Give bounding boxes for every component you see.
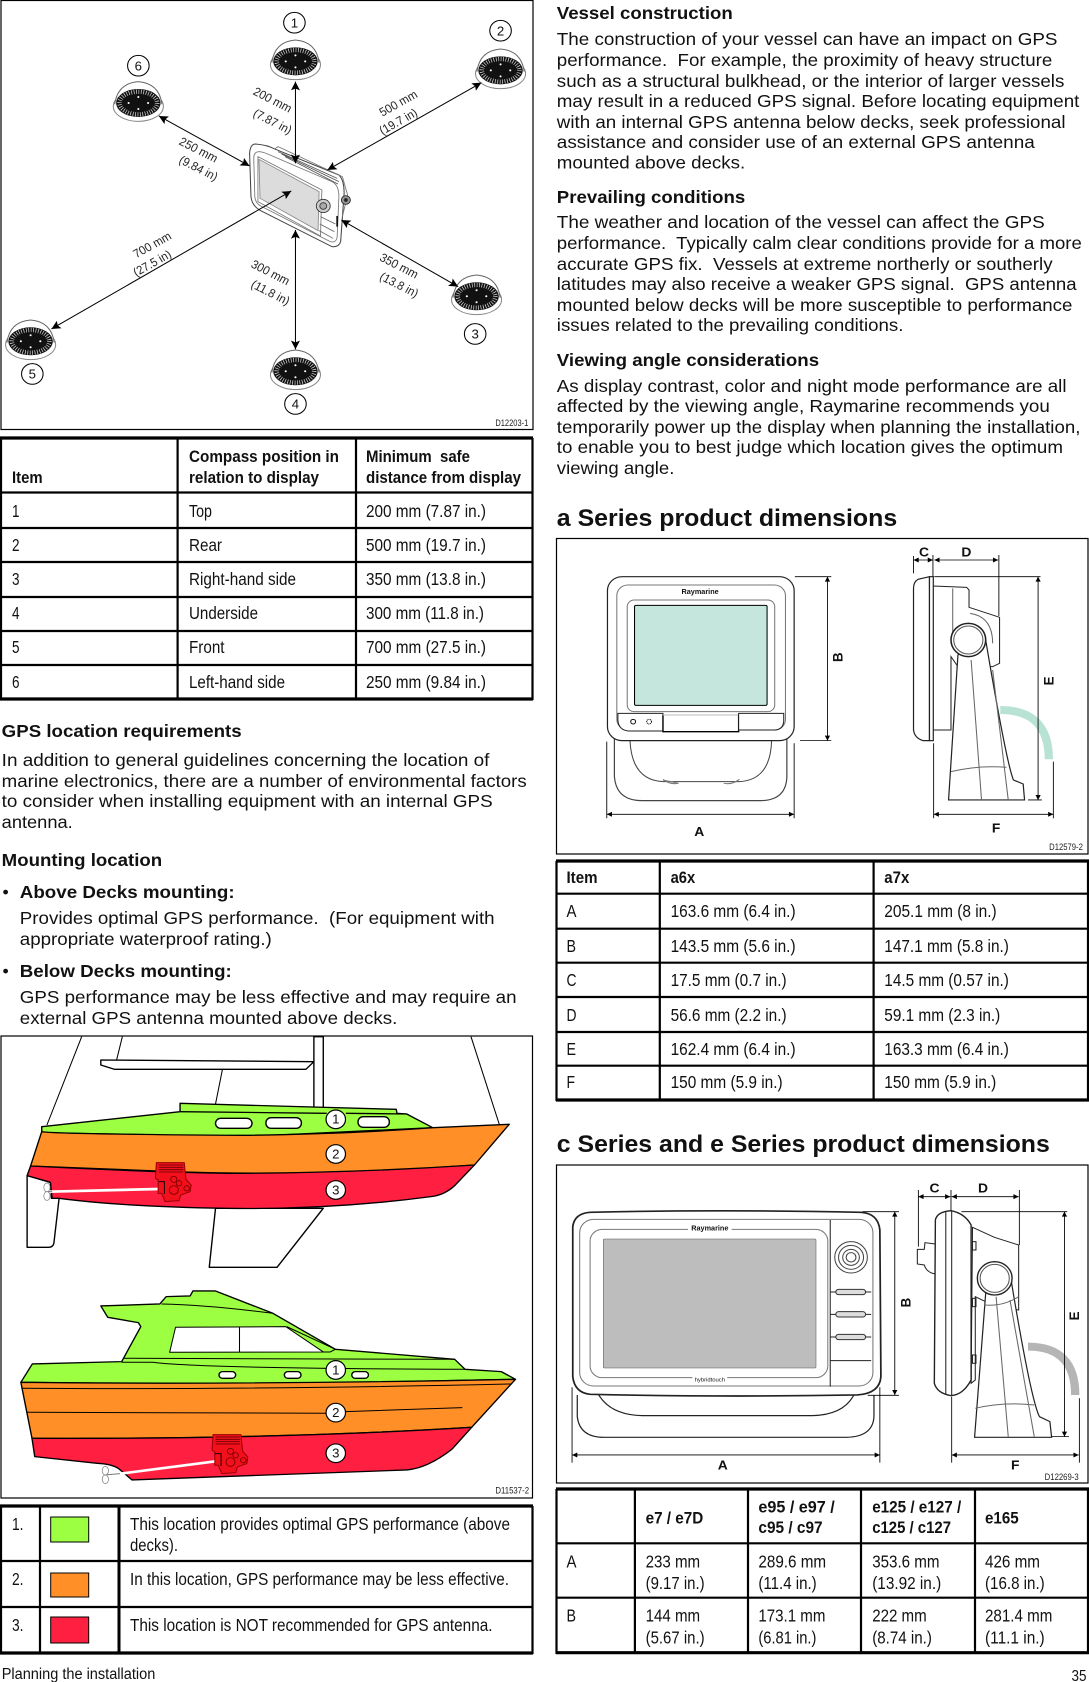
- table rows: 700 mm (27.5 in.): [366, 637, 486, 657]
- a Series dimension letters: F: [992, 821, 1000, 836]
- panel: c and e Series dimension drawing: [556, 1165, 1088, 1483]
- table row A: (13.92 in.): [872, 1573, 941, 1593]
- table rows: 5: [12, 637, 20, 657]
- legend row 3: This location is NOT recommended for GPS antenna.: [130, 1615, 492, 1635]
- c Series brand name: Raymarine: [691, 1225, 728, 1233]
- table rows: 4: [12, 603, 20, 623]
- heading: Vessel construction: Vessel construction: [557, 3, 733, 23]
- callout numbers: 1: [291, 16, 298, 30]
- a Series dimension letters: C: [919, 545, 929, 560]
- table header: e125 / e127 /: [872, 1498, 961, 1517]
- heading: Viewing angle considerations: Viewing angle considerations: [557, 350, 819, 370]
- table row B: (6.81 in.): [758, 1627, 816, 1647]
- table rows: 147.1 mm (5.8 in.): [884, 936, 1009, 956]
- callout numbers: 5: [29, 367, 36, 382]
- table: location legend: [0, 1506, 533, 1654]
- heading: Mounting location: Mounting location: [2, 850, 162, 870]
- legend row 1: decks).: [130, 1535, 178, 1555]
- a Series dimension letters: A: [694, 824, 704, 839]
- arrow: to compass 2: [327, 83, 481, 170]
- table header: a7x: [884, 868, 910, 887]
- table row A: 289.6 mm: [758, 1551, 826, 1571]
- table row A: 353.6 mm: [872, 1551, 940, 1571]
- table header: Minimum safe: [366, 447, 470, 466]
- icon: compass 2: [476, 49, 526, 89]
- text block: vessel construction: with an internal GPS antenna below decks, seek professional: [556, 112, 1066, 132]
- table rows: 3: [12, 569, 20, 589]
- table rows: 59.1 mm (2.3 in.): [884, 1005, 1000, 1025]
- table rows: 162.4 mm (6.4 in.): [671, 1039, 796, 1059]
- text block: viewing angle: As display contrast, color and night mode performance are all: [557, 376, 1066, 396]
- a Series dimension letters: D: [961, 545, 972, 560]
- table header: [646, 1498, 1019, 1537]
- text block: GPS location intro: marine electronics, there are a number of environmental factors: [2, 771, 527, 791]
- table header: c95 / c97: [758, 1518, 823, 1537]
- icon: compass 1: [270, 40, 320, 80]
- text block: GPS location intro: In addition to general guidelines concerning the location of: [2, 750, 489, 770]
- a Series dimension letters: B: [830, 652, 846, 662]
- table row B: (8.74 in.): [872, 1627, 932, 1647]
- table rows: Underside: [189, 603, 258, 623]
- a Series dimension lines: [607, 555, 1053, 818]
- table rows: Rear: [189, 535, 222, 555]
- c Series dimension lines: [572, 1190, 1079, 1463]
- distance labels: 200 mm: [251, 85, 294, 115]
- table rows: F: [566, 1072, 575, 1092]
- text block: viewing angle: [557, 376, 1080, 478]
- text block: below decks mounting: [2, 961, 516, 1028]
- table rows: 56.6 mm (2.2 in.): [671, 1005, 787, 1025]
- table row B: 173.1 mm: [758, 1606, 825, 1626]
- text block: GPS location intro: antenna.: [2, 812, 73, 832]
- legend row 1: This location provides optimal GPS performance (above: [130, 1514, 510, 1534]
- distance labels: [131, 85, 421, 308]
- text block: above decks mounting: Provides optimal GPS performance. (For equipment with: [20, 908, 495, 928]
- panel: compass safe distance diagram: [1, 0, 533, 430]
- table rows: Front: [189, 637, 225, 657]
- a Series dimension letters: E: [1041, 676, 1057, 685]
- icon: compass 4: [270, 350, 320, 390]
- c Series dimension letters: D: [978, 1181, 988, 1196]
- table row A: (11.4 in.): [758, 1573, 817, 1593]
- table header: c125 / c127: [872, 1518, 951, 1537]
- a Series front view: [607, 577, 794, 801]
- arrow: to compass 1: [294, 82, 297, 163]
- table header: distance from display: [366, 468, 521, 487]
- table rows: 150 mm (5.9 in.): [884, 1072, 996, 1092]
- text block: prevailing conditions: The weather and location of the vessel can affect the GPS: [557, 212, 1045, 232]
- sailboat: [27, 1037, 509, 1267]
- distance labels: (7.87 in): [251, 106, 294, 137]
- table rows: 300 mm (11.8 in.): [366, 603, 484, 623]
- table row B: 281.4 mm: [985, 1606, 1052, 1626]
- table rows: 17.5 mm (0.7 in.): [671, 970, 787, 990]
- table header: relation to display: [189, 468, 319, 487]
- text block: viewing angle: affected by the viewing angle, Raymarine recommends you: [557, 396, 1050, 416]
- legend row 3: 3.: [12, 1615, 24, 1635]
- figure code: D12203-1: [495, 418, 528, 428]
- c Series brand name: hybridtouch: [695, 1378, 725, 1384]
- sailboat shaft and propeller: [44, 1183, 159, 1200]
- table row B: B: [566, 1606, 576, 1626]
- table rows: C: [566, 970, 576, 990]
- text block: prevailing conditions: mounted below decks will be more susceptible to performance: [557, 295, 1073, 315]
- distance labels: (9.84 in): [177, 153, 220, 184]
- table header: Item: [12, 468, 43, 487]
- table header: Item: [566, 868, 598, 887]
- table row A: (16.8 in.): [985, 1573, 1045, 1593]
- legend row 1: [12, 1514, 510, 1555]
- table rows: Top: [189, 501, 212, 521]
- heading: GPS location requirements: GPS location requirements: [2, 721, 242, 741]
- table header: e95 / e97 /: [758, 1498, 835, 1517]
- callout numbers: 2: [497, 24, 504, 38]
- table rows: 163.6 mm (6.4 in.): [671, 901, 796, 921]
- text block: vessel construction: assistance and consider use of an external GPS antenna: [557, 132, 1035, 152]
- table rows: 2: [12, 535, 20, 555]
- zone callout numbers: 3: [332, 1183, 339, 1197]
- zone callout numbers: 2: [332, 1405, 339, 1420]
- table rows: 163.3 mm (6.4 in.): [884, 1039, 1009, 1059]
- table rows: [566, 901, 1009, 1092]
- table rows: 6: [12, 672, 20, 692]
- table rows: 150 mm (5.9 in.): [671, 1072, 783, 1092]
- table row B: (11.1 in.): [985, 1627, 1045, 1647]
- motorboat shaft and propeller: [102, 1461, 216, 1484]
- zone callout numbers: 1: [332, 1363, 339, 1377]
- table rows: Right-hand side: [189, 569, 296, 589]
- text block: below decks mounting: GPS performance may be less effective and may require an: [20, 987, 517, 1007]
- c Series side view: [917, 1211, 1075, 1437]
- table rows: 14.5 mm (0.57 in.): [884, 970, 1009, 990]
- icon: compass 5: [6, 320, 56, 360]
- text block: above decks mounting: •: [2, 882, 9, 902]
- callout numbers: [29, 16, 504, 412]
- table rows: 350 mm (13.8 in.): [366, 569, 486, 589]
- table header: [12, 447, 521, 487]
- text block: below decks mounting: external GPS antenna mounted above decks.: [20, 1008, 397, 1028]
- table rows: 250 mm (9.84 in.): [366, 672, 486, 692]
- heading: c Series and e Series product dimensions: c Series and e Series product dimensions: [557, 1131, 1050, 1158]
- sailboat engine: [155, 1163, 191, 1202]
- c Series dimension letters: F: [1011, 1458, 1019, 1472]
- c Series dimension letters: A: [718, 1458, 728, 1472]
- table rows: 143.5 mm (5.6 in.): [671, 936, 796, 956]
- c Series brand name: [688, 1225, 732, 1384]
- table row A: A: [566, 1551, 577, 1571]
- table row B: [566, 1606, 1052, 1647]
- heading: a Series product dimensions: a Series product dimensions: [557, 505, 897, 532]
- table rows: 1: [12, 501, 20, 521]
- table row A: [566, 1551, 1045, 1593]
- legend row 1: 1.: [12, 1514, 24, 1534]
- figure code: D12269-3: [1045, 1472, 1079, 1482]
- distance labels: 350 mm: [377, 251, 421, 281]
- table row A: 233 mm: [646, 1551, 700, 1571]
- text block: above decks mounting: appropriate waterproof rating.): [20, 929, 272, 949]
- legend row 2: In this location, GPS performance may be less effective.: [130, 1569, 509, 1589]
- text block: GPS location intro: to consider when installing equipment with an internal GPS: [2, 791, 493, 811]
- table row A: 426 mm: [985, 1551, 1040, 1571]
- c Series dimension letters: C: [929, 1181, 940, 1196]
- text block: viewing angle: to enable you to best judge which location gives the optimum: [557, 437, 1063, 457]
- text block: viewing angle: viewing angle.: [557, 458, 674, 478]
- distance labels: (13.8 in): [377, 270, 421, 300]
- legend row 2: [12, 1569, 509, 1597]
- text block: below decks mounting: Below Decks mounting:: [20, 961, 232, 981]
- text block: vessel construction: mounted above decks.: [557, 152, 745, 172]
- table row A: (9.17 in.): [646, 1573, 705, 1593]
- table rows: E: [566, 1039, 576, 1059]
- table rows: Left-hand side: [189, 672, 285, 692]
- text block: vessel construction: performance. For example, the proximity of heavy structure: [557, 50, 1052, 70]
- distance labels: 700 mm: [131, 229, 174, 261]
- table header: e7 / e7D: [646, 1508, 703, 1527]
- table rows: 500 mm (19.7 in.): [366, 535, 486, 555]
- panel: boat GPS location zones: [1, 1036, 532, 1498]
- zone callout numbers: 1: [332, 1112, 339, 1127]
- motorboat: [21, 1291, 515, 1480]
- table rows: D: [566, 1005, 576, 1025]
- distance labels: (11.8 in): [249, 277, 292, 308]
- text block: below decks mounting: •: [2, 961, 9, 981]
- callout numbers: 6: [135, 59, 142, 73]
- c Series dimension letters: E: [1067, 1311, 1082, 1320]
- table header: [566, 868, 910, 887]
- table: compass positions: [0, 438, 533, 700]
- text block: prevailing conditions: latitudes may also receive a weaker GPS signal. GPS antenna: [557, 274, 1077, 294]
- c Series dimension letters: B: [898, 1298, 914, 1307]
- text block: viewing angle: temporarily power up the display when planning the installation,: [557, 417, 1080, 437]
- heading: Prevailing conditions: Prevailing conditions: [557, 187, 745, 207]
- zone callout numbers: 2: [332, 1147, 339, 1161]
- text block: vessel construction: such as a structural bulkhead, or the interior of larger vessels: [557, 71, 1064, 91]
- legend row 2: 2.: [12, 1569, 24, 1589]
- icon: compass 3: [452, 275, 502, 315]
- motorboat engine: [212, 1435, 248, 1474]
- table rows: 200 mm (7.87 in.): [366, 501, 486, 521]
- text block: above decks mounting: Above Decks mounting:: [20, 882, 235, 902]
- legend row 3: [12, 1615, 492, 1643]
- table header: Compass position in: [189, 447, 339, 466]
- arrow: to compass 3: [341, 220, 458, 287]
- table rows: [12, 501, 486, 692]
- callout numbers: 3: [472, 327, 479, 342]
- table header: a6x: [671, 868, 696, 887]
- text block: prevailing conditions: accurate GPS fix. Vessels at extreme northerly or southerly: [557, 254, 1053, 274]
- table: a Series dimensions: [556, 861, 1089, 1101]
- text block: above decks mounting: [2, 882, 495, 949]
- text block: prevailing conditions: performance. Typically calm clear conditions provide for a more: [557, 233, 1082, 253]
- numbered callouts: [22, 12, 511, 414]
- table: c and e Series dimensions: [556, 1489, 1089, 1654]
- zone callout numbers: [332, 1112, 339, 1461]
- table rows: A: [566, 901, 577, 921]
- callout numbers: 4: [292, 397, 299, 412]
- table rows: B: [566, 936, 576, 956]
- zone callouts: [326, 1110, 346, 1463]
- a Series dimension letters: [694, 545, 1057, 839]
- table row B: 144 mm: [646, 1606, 700, 1626]
- arrow: to compass 4: [294, 230, 297, 349]
- text block: vessel construction: may result in a reduced GPS signal. Before locating equipment: [557, 91, 1079, 111]
- figure code: D11537-2: [495, 1486, 529, 1496]
- a Series side view: [914, 577, 1049, 800]
- table header: e165: [985, 1508, 1019, 1527]
- distance labels: 250 mm: [177, 135, 220, 165]
- arrow: to compass 5: [51, 191, 291, 329]
- c Series front view: [573, 1211, 881, 1437]
- table rows: 205.1 mm (8 in.): [884, 901, 997, 921]
- distance labels: (19.7 in): [377, 106, 420, 138]
- table row B: (5.67 in.): [646, 1627, 705, 1647]
- text block: prevailing conditions: [557, 212, 1082, 335]
- text block: vessel construction: [556, 29, 1079, 172]
- distance labels: 300 mm: [249, 257, 292, 288]
- text block: prevailing conditions: issues related to the prevailing conditions.: [557, 315, 903, 335]
- text block: GPS location intro: [2, 750, 527, 832]
- a Series brand name: Raymarine: [682, 588, 719, 596]
- table row B: 222 mm: [872, 1606, 927, 1626]
- arrow: to compass 6: [159, 116, 250, 166]
- distance labels: (27.5 in): [131, 247, 174, 279]
- distance labels: 500 mm: [377, 87, 420, 119]
- icon: compass 6: [113, 82, 163, 121]
- text block: vessel construction: The construction of your vessel can have an impact on GPS: [557, 29, 1058, 49]
- zone callout numbers: 3: [332, 1446, 339, 1461]
- icon: display unit: [250, 144, 350, 247]
- panel: a Series dimension drawing: [556, 538, 1088, 854]
- c Series dimension letters: [718, 1181, 1082, 1472]
